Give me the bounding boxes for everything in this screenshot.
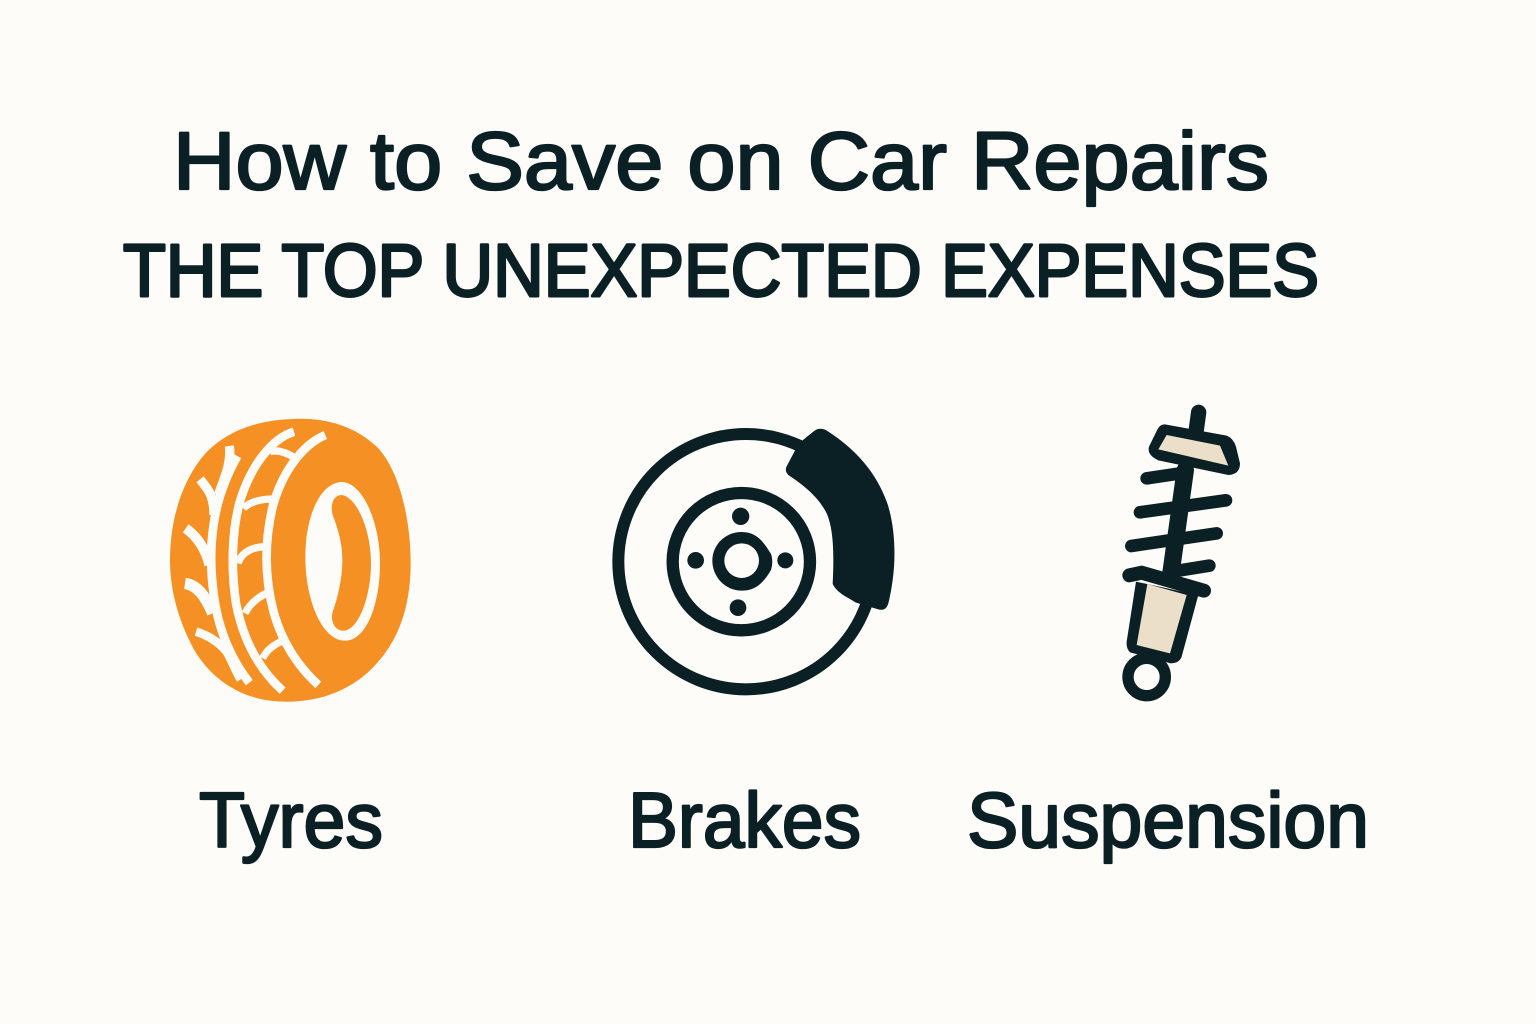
lower body [1127, 582, 1198, 663]
subtitle: THE TOP UNEXPECTED EXPENSES [123, 229, 1319, 312]
spring coils [1129, 472, 1226, 591]
label: brakes: Brakes [628, 776, 861, 864]
label: suspension: Suspension [967, 776, 1369, 864]
tread grooves [185, 432, 325, 691]
hub [687, 508, 793, 616]
label: tyres: Tyres [199, 776, 383, 864]
title: How to Save on Car Repairs [173, 116, 1269, 207]
bottom eye [1128, 658, 1165, 696]
brake caliper [786, 429, 894, 610]
tyre sidewall opening [305, 482, 380, 641]
icon: tyre [170, 419, 411, 702]
icon: brake disc [618, 429, 894, 689]
top rod [1195, 412, 1199, 437]
icon: suspension shock absorber [1127, 412, 1240, 696]
top mount [1149, 424, 1240, 475]
